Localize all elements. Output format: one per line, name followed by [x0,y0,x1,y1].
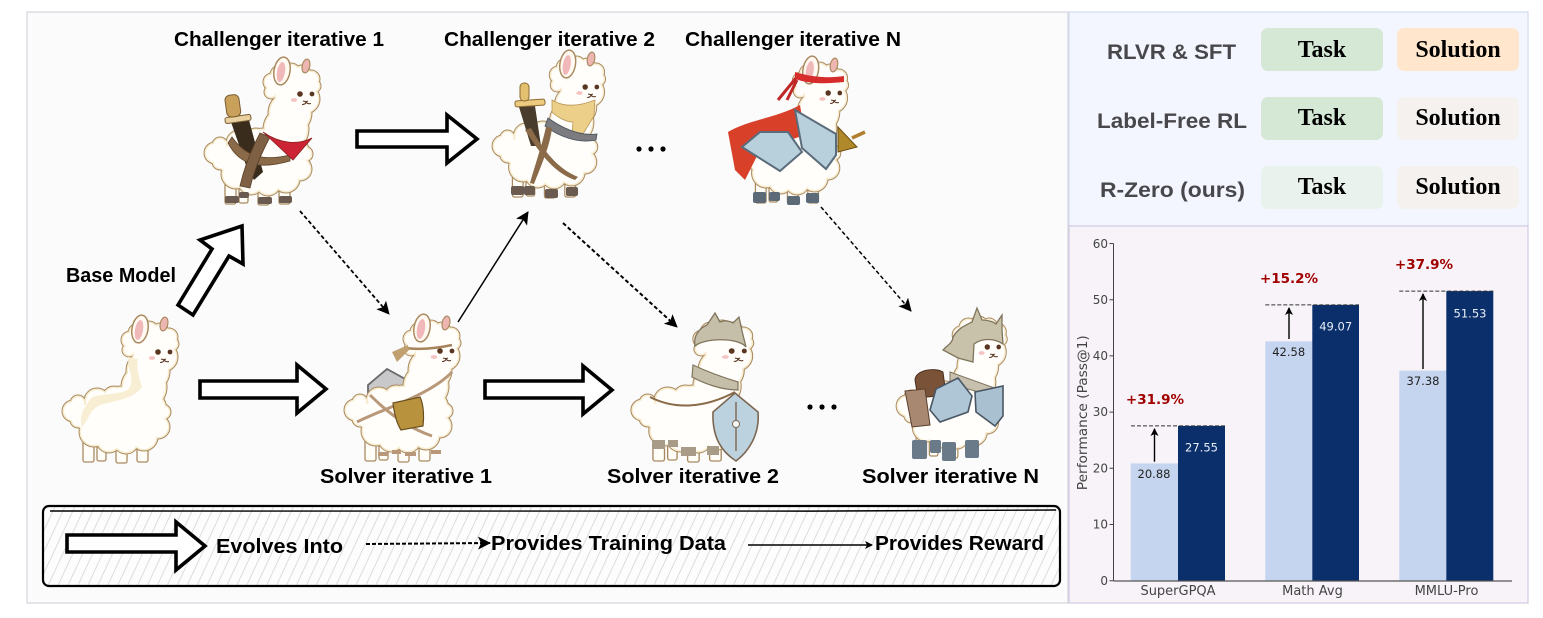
group: MMLU-Pro: 51.53 [1454,306,1486,320]
bar chart: Pass@1 performance [1075,237,1512,599]
group: MMLU-Pro [1395,257,1493,599]
pill: task row 1 [1261,28,1383,71]
legend arrow: reward [748,544,872,546]
arrow: base model evolves into solver 1 [200,365,326,413]
group: Math Avg: 42.58 [1272,345,1305,359]
group: MMLU-Pro: MMLU-Pro [1415,584,1478,599]
y axis ticks: 0 [1100,574,1108,588]
group: SuperGPQA: 20.88 [1138,467,1170,481]
y axis ticks [1093,237,1114,588]
arrow: solver 1 provides reward to challenger 2 [458,212,528,322]
legend text: evolves into: Evolves Into [216,536,343,558]
icon: base model alpaca [64,314,177,463]
icon: solver 1 alpaca with bag [346,313,459,462]
group: SuperGPQA: SuperGPQA [1140,584,1216,599]
group: Math Avg [1260,271,1359,599]
label: Challenger iterative 1: Challenger iterative 1 [174,29,384,51]
arrow: challenger 1 provides training data to solver 1 [300,211,389,314]
label: Solver iterative 2: Solver iterative 2 [607,466,779,488]
arrow: solver 1 evolves into solver 2 [485,366,612,414]
panel: evolution diagram [27,12,1068,603]
group: Math Avg: Math Avg [1282,584,1343,599]
pill: task row 2: Task [1298,105,1347,131]
ellipsis: challengers [636,146,666,152]
ellipsis: solvers [807,404,837,410]
y axis ticks: 40 [1093,349,1108,363]
arrow: challenger 1 evolves into challenger 2 [357,115,477,163]
label: Solver iterative N: Solver iterative N [862,466,1039,488]
arrow: challenger 2 provides training data to solver 2 [563,223,677,327]
arrow: base model evolves into challenger 1 [178,226,243,315]
y axis ticks: 60 [1093,237,1108,251]
group: Math Avg: +15.2% [1260,271,1319,287]
y axis ticks: 10 [1093,518,1108,532]
pill: solution row 1 [1397,28,1519,71]
pill: task row 3 [1261,166,1383,209]
legend arrow: training data [366,543,490,544]
panel: performance chart [1069,226,1528,603]
icon: challenger 2 alpaca with scarf and sword [494,49,604,198]
group: MMLU-Pro: +37.9% [1395,257,1454,273]
icon: challenger N alpaca with cape and shields [728,55,865,205]
icon: solver 2 alpaca with helmet and shield [633,313,758,462]
pill: solution row 2 [1397,97,1519,140]
y axis ticks: 30 [1093,405,1108,419]
pill: solution row 1: Solution [1415,37,1501,63]
group: SuperGPQA [1126,392,1225,599]
icon: challenger 1 alpaca with sword and red scarf [206,56,319,205]
pill: solution row 2: Solution [1415,105,1501,131]
row label: R-Zero (ours): R-Zero (ours) [1100,179,1245,202]
group: Math Avg: 49.07 [1319,320,1352,334]
label: Base Model: Base Model [66,265,176,287]
group: SuperGPQA: 27.55 [1185,441,1218,455]
pill: solution row 3: Solution [1415,174,1501,200]
arrow: challenger N provides training data to solver N [821,207,911,311]
pill: solution row 3 [1397,166,1519,209]
label: Challenger iterative 2: Challenger iterative 2 [444,29,655,51]
label: Solver iterative 1: Solver iterative 1 [320,466,492,488]
legend box [43,506,1060,586]
pill: task row 2 [1261,97,1383,140]
legend text: training data: Provides Training Data [491,533,727,555]
pill: task row 3: Task [1298,174,1347,200]
legend arrow: evolves into [67,522,205,570]
row label: RLVR & SFT: RLVR & SFT [1107,41,1236,64]
y axis ticks: 50 [1093,293,1108,307]
legend text: reward: Provides Reward [875,533,1044,555]
panel: method comparison [1069,12,1528,226]
axis title: Performance (Pass@1) [1075,335,1091,490]
icon: solver N alpaca with helmet and armor [898,308,1005,461]
group: MMLU-Pro: 37.38 [1407,374,1439,388]
y axis ticks: 20 [1093,462,1108,476]
row label: Label-Free RL: Label-Free RL [1097,110,1247,133]
group: SuperGPQA: +31.9% [1126,392,1185,408]
pill: task row 1: Task [1298,37,1347,63]
label: Challenger iterative N: Challenger iterative N [685,29,901,51]
